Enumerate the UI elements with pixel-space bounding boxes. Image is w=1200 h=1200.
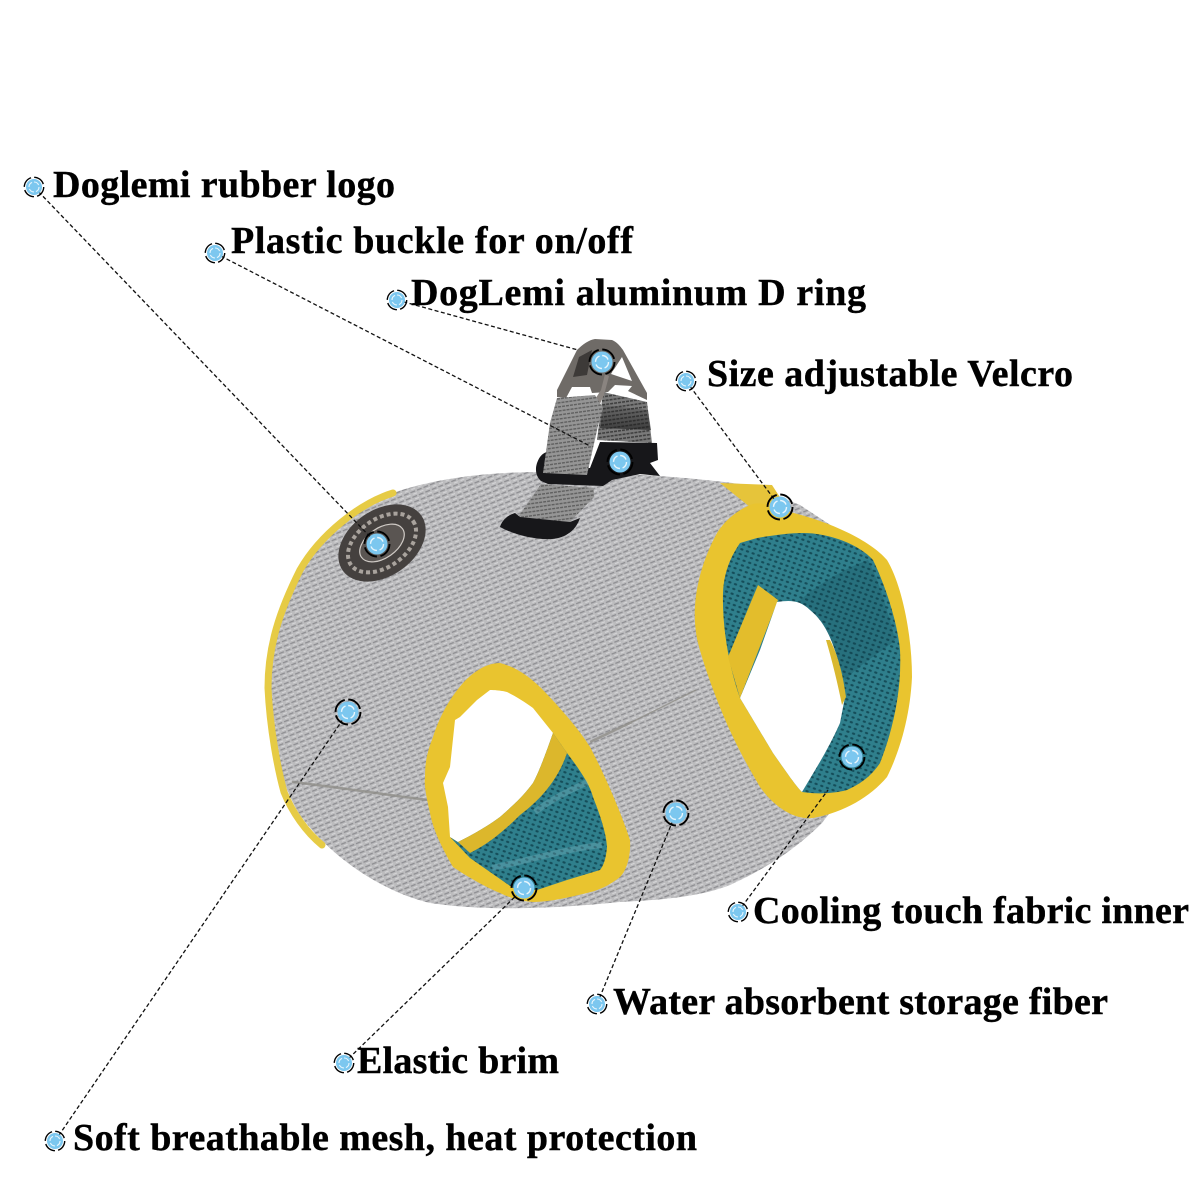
neck opening: yellow rim (695, 503, 912, 818)
leg opening: lighter lining bands (492, 782, 602, 868)
leg opening: yellow rim (425, 663, 630, 902)
callout: Doglemi rubber logo: Doglemi rubber logo (53, 164, 395, 206)
harness product illustration (266, 339, 912, 908)
leg opening: teal cooling lining (450, 733, 607, 890)
callout: Soft breathable mesh: Soft breathable mesh, heat protection (73, 1117, 697, 1159)
neck opening: lining fold shadow (795, 560, 895, 680)
callout: Elastic brim: Elastic brim (357, 1040, 559, 1082)
callout: Elastic brim (334, 876, 559, 1082)
rubber logo patch (324, 488, 440, 598)
neck opening: teal cooling lining (723, 533, 900, 793)
back webbing strap (597, 392, 652, 443)
neck opening: inner yellow strip (728, 585, 778, 698)
leg opening: white hole (443, 690, 553, 842)
top yellow collar tab (720, 483, 785, 507)
callout: Water absorbent fiber (587, 800, 1108, 1023)
callout: D ring: DogLemi aluminum D ring (411, 272, 866, 314)
callout: Doglemi rubber logo (24, 164, 395, 556)
mesh seams (292, 690, 696, 800)
callout: Plastic buckle: Plastic buckle for on/off (231, 220, 634, 262)
callout: Velcro: Size adjustable Velcro (707, 353, 1073, 395)
callout: Cooling touch fabric (728, 744, 1189, 932)
dashed leader lines (34, 187, 828, 1141)
neck opening: white hole (740, 601, 845, 792)
neck opening: far yellow sliver (826, 640, 846, 705)
leg opening: inner yellow band (458, 733, 567, 853)
callout: Water absorbent fiber: Water absorbent storage fiber (613, 981, 1108, 1023)
callout: D ring (387, 272, 866, 374)
black plastic buckle (536, 442, 660, 486)
mesh body (266, 472, 880, 908)
aluminum D ring (557, 339, 647, 408)
strap slot trim (500, 513, 580, 539)
callout: Plastic buckle (205, 220, 634, 474)
top nylon strap (543, 395, 603, 475)
callout: Cooling touch fabric: Cooling touch fabric inner (753, 890, 1189, 932)
callout: Soft breathable mesh (45, 700, 697, 1159)
lower nylon strap (518, 484, 594, 522)
yellow hem along the back edge (268, 493, 393, 845)
callout: Velcro (676, 353, 1073, 520)
